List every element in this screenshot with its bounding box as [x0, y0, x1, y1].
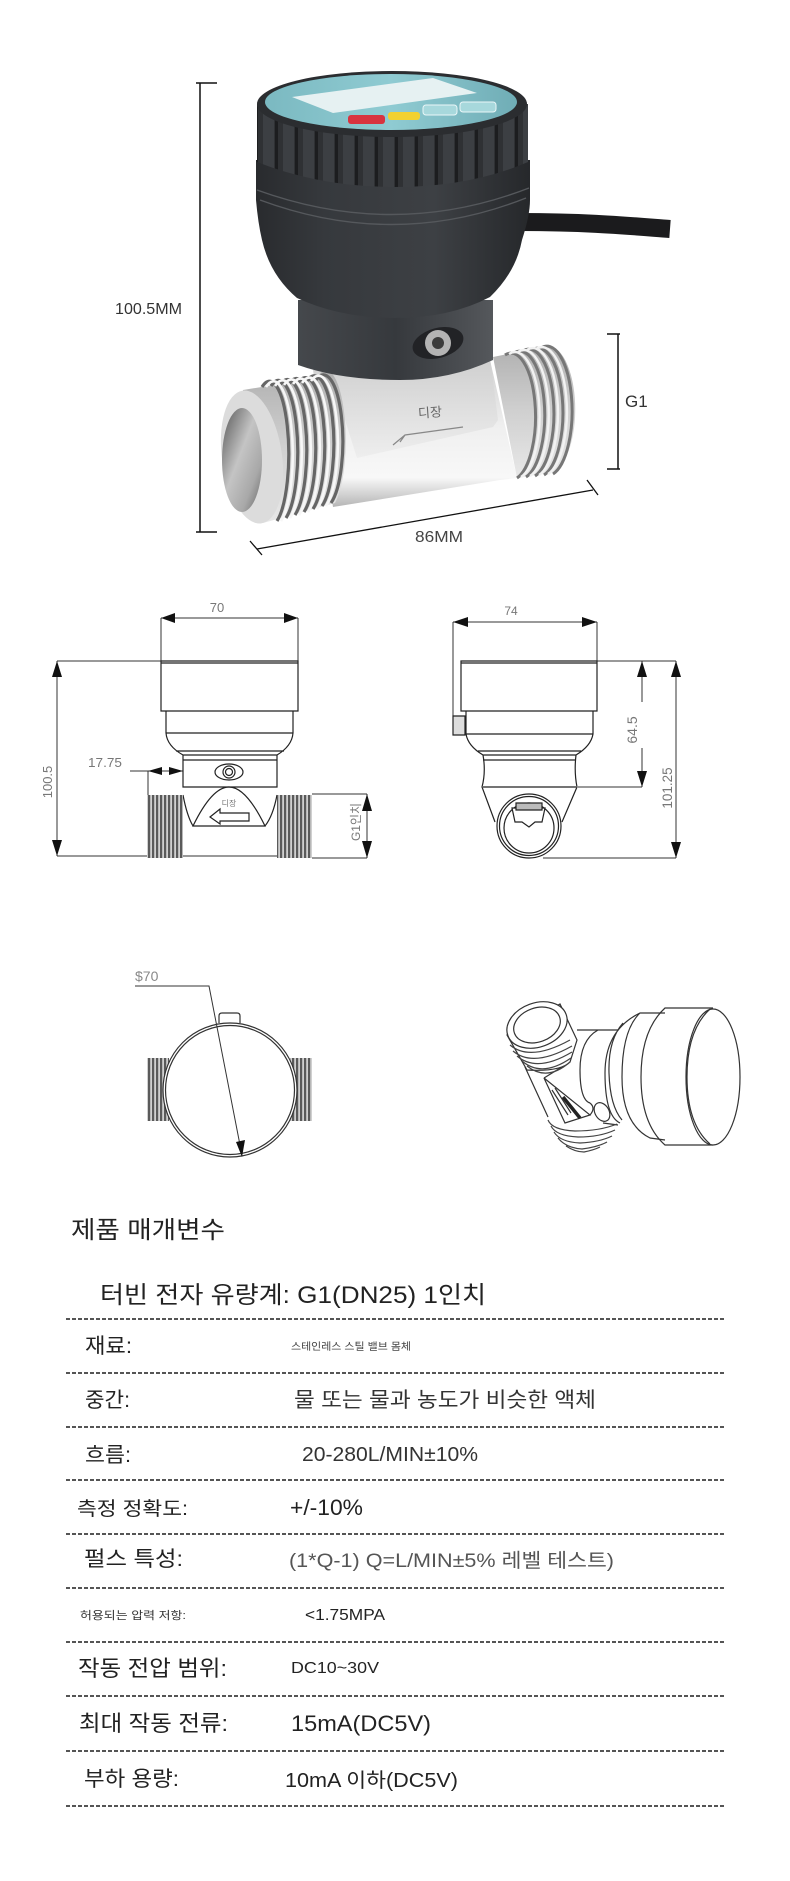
lower housing	[166, 711, 293, 787]
row: load: 10mA 이하(DC5V)	[285, 1769, 458, 1792]
meter head	[161, 661, 298, 711]
row: accuracy	[77, 1495, 363, 1520]
product photo with dimensions	[115, 71, 670, 555]
row: flow: 흐름:	[85, 1444, 131, 1467]
row: material: 재료:	[85, 1335, 132, 1358]
right thread	[493, 346, 575, 478]
arrow mark	[210, 809, 249, 824]
row: pulse: (1*Q-1) Q=L/MIN±5% 레벨 테스트)	[289, 1550, 614, 1572]
body band	[257, 188, 529, 225]
flow arrow	[393, 427, 463, 445]
row: load: 부하 용량:	[84, 1768, 179, 1791]
pipe edge	[525, 1062, 593, 1117]
outer circle	[163, 1023, 297, 1157]
row: material	[85, 1335, 411, 1358]
row: load	[84, 1768, 458, 1792]
cast mark 디장: 디장	[418, 404, 443, 421]
labels: 100.5	[40, 766, 55, 798]
row: pressure	[80, 1607, 385, 1624]
label: G1: G1	[625, 392, 648, 411]
dimension: 86MM	[250, 480, 598, 555]
pipe body	[313, 360, 517, 507]
row: voltage: 작동 전압 범위:	[78, 1656, 227, 1681]
labels	[40, 600, 363, 841]
T plate	[313, 358, 498, 458]
section heading: 제품 매개변수	[71, 1217, 225, 1244]
row: material: 스테인레스 스틸 밸브 몸체	[291, 1340, 411, 1353]
oval port	[591, 1100, 613, 1124]
lower housing	[466, 711, 593, 822]
labels: 70	[210, 600, 224, 615]
row: accuracy: +/-10%	[290, 1495, 363, 1520]
arrowhead	[236, 1140, 245, 1157]
knurled cap	[257, 104, 528, 187]
upper port	[500, 994, 577, 1073]
neck ring	[298, 300, 493, 380]
row: voltage: DC10~30V	[291, 1660, 380, 1677]
arrowheads	[453, 617, 681, 858]
meter body	[256, 160, 530, 318]
row: pressure: <1.75MPA	[305, 1607, 385, 1624]
drawing: side elevation	[453, 604, 681, 858]
labels: G1인치	[349, 803, 363, 841]
label: 100.5MM: 100.5MM	[115, 301, 182, 318]
drawing: front elevation	[40, 600, 372, 858]
dimension: overall height	[196, 83, 217, 532]
row: medium	[85, 1389, 596, 1412]
housing	[605, 1013, 665, 1140]
dimension: G1	[607, 334, 620, 469]
table title: 터빈 전자 유량계: G1(DN25) 1인치	[100, 1282, 486, 1309]
row: accuracy: 측정 정확도:	[77, 1498, 188, 1520]
row: medium: 중간:	[85, 1389, 130, 1412]
labels	[504, 604, 675, 809]
arrowheads	[52, 613, 372, 858]
labels: 101.25	[660, 767, 675, 809]
row: pulse	[84, 1548, 614, 1572]
labels: 74	[504, 604, 518, 618]
dashed rows	[66, 1319, 724, 1806]
row: flow: 20-280L/MIN±10%	[302, 1444, 478, 1466]
side button	[453, 716, 465, 735]
nameplate mark	[563, 1097, 580, 1118]
labels: 디장	[222, 798, 237, 808]
drawing: isometric view	[500, 994, 740, 1152]
label: $70: $70	[135, 968, 159, 984]
row: pressure: 허용되는 압력 저항:	[80, 1609, 186, 1622]
lower thread	[548, 1120, 617, 1152]
drawing: top view	[135, 968, 312, 1157]
left port	[213, 386, 291, 528]
left thread	[243, 370, 346, 523]
cap face	[686, 1009, 740, 1145]
top tab	[219, 1013, 240, 1023]
threads	[147, 795, 312, 858]
arch mark	[183, 787, 277, 826]
row: pulse: 펄스 특성:	[84, 1548, 183, 1571]
threads	[147, 1058, 312, 1121]
label: 86MM: 86MM	[415, 529, 463, 546]
screw	[409, 322, 467, 364]
cap	[641, 1008, 713, 1145]
row: voltage	[78, 1656, 380, 1681]
labels: 64.5	[624, 716, 640, 744]
dimension lines	[57, 618, 367, 858]
icon: cable	[520, 222, 670, 229]
row: flow	[85, 1444, 478, 1467]
nameplate arrow	[552, 1088, 571, 1115]
dimension lines	[453, 622, 676, 858]
meter head	[461, 661, 597, 711]
labels: 17.75	[88, 755, 122, 770]
row: current	[79, 1711, 431, 1736]
nameplate	[544, 1078, 590, 1123]
row: current: 15mA(DC5V)	[291, 1711, 431, 1736]
screw eye	[215, 764, 243, 780]
pipe end	[497, 794, 561, 858]
body	[577, 1030, 618, 1125]
display face	[257, 71, 527, 137]
row: medium: 물 또는 물과 농도가 비슷한 액체	[294, 1389, 596, 1412]
row: current: 최대 작동 전류:	[79, 1711, 228, 1736]
leader with arrow	[135, 986, 240, 1145]
